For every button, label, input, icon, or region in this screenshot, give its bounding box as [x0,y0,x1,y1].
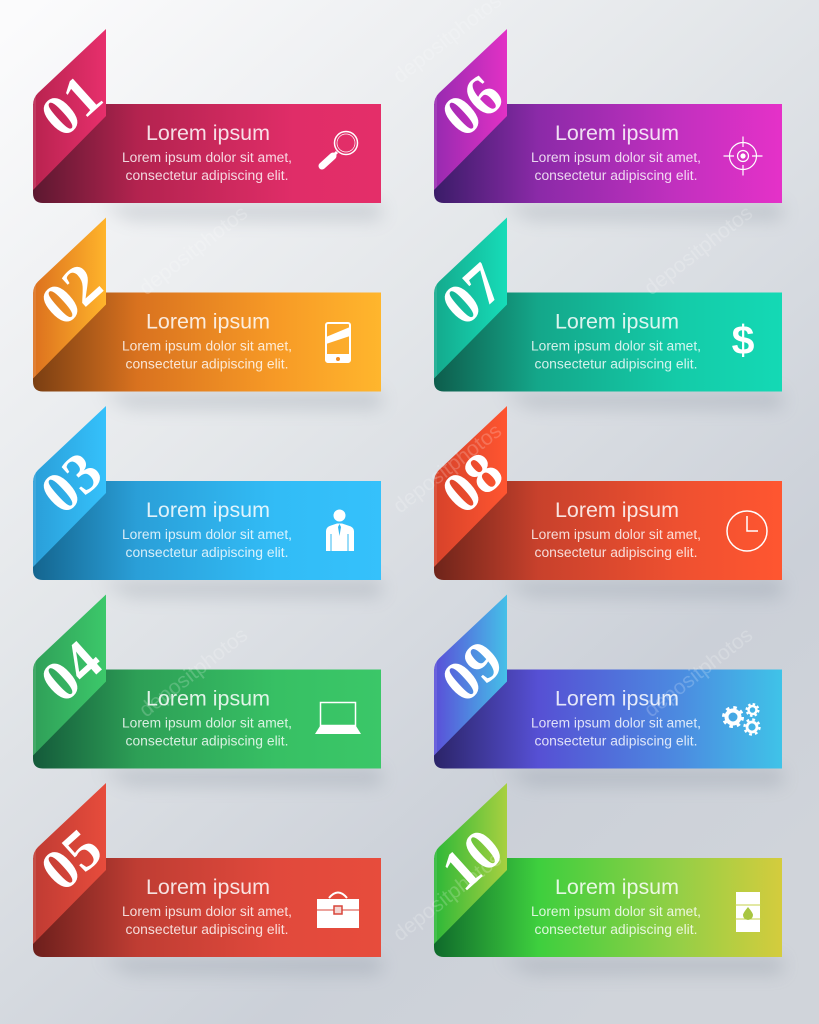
card 07 [429,218,782,408]
heading 03: Lorem ipsum [146,499,270,522]
description 04 [122,716,292,748]
banner 07 [434,292,782,392]
banner 04 [33,670,381,768]
description 03: Lorem ipsum dolor sit amet, [122,527,292,542]
card 08 [429,406,782,596]
number 03: 03 [28,439,114,526]
card 09 [429,594,782,784]
banner 05 [33,858,381,957]
heading 09: Lorem ipsum [555,688,679,710]
description 07: consectetur adipiscing elit. [534,356,698,372]
description 03 [122,527,292,560]
number 05: 05 [28,816,114,903]
description 04: Lorem ipsum dolor sit amet, [122,716,292,730]
description 06 [531,150,701,183]
icon: dollar: $ [732,317,755,363]
card 04 [28,594,381,784]
card 05 [28,783,381,973]
heading 08: Lorem ipsum [555,499,679,522]
watermark: depositphotos [135,201,252,300]
card 02 [28,218,381,408]
banner 03 [33,481,381,580]
description 01 [122,150,292,183]
banner 08 [434,481,782,580]
description 04: consectetur adipiscing elit. [126,734,288,748]
description 05: consectetur adipiscing elit. [126,922,288,937]
icon: magnifier [322,132,358,166]
description 08 [531,527,701,560]
folded tab 05 [33,783,106,944]
card 06 [429,29,782,219]
number 01: 01 [28,62,114,149]
number 07: 07 [429,250,515,338]
description 06: Lorem ipsum dolor sit amet, [531,150,701,165]
description 06: consectetur adipiscing elit. [534,168,698,183]
description 05 [122,904,292,937]
watermark: depositphotos [135,623,252,722]
heading 01: Lorem ipsum [146,122,270,145]
description 05: Lorem ipsum dolor sit amet, [122,904,292,919]
description 10: Lorem ipsum dolor sit amet, [531,904,701,919]
folded tab 02 [33,218,106,378]
number 08: 08 [429,439,515,526]
description 02: Lorem ipsum dolor sit amet, [122,338,292,354]
number 02: 02 [28,250,114,338]
icon: smartphone [326,323,350,363]
icon: oil barrel [735,892,761,932]
description 01: consectetur adipiscing elit. [126,168,288,183]
description 10: consectetur adipiscing elit. [534,922,698,937]
heading 07: Lorem ipsum [555,310,679,334]
description 08: Lorem ipsum dolor sit amet, [531,527,701,542]
folded tab 07 [434,218,507,378]
watermark: depositphotos [640,623,757,722]
icon: laptop [315,702,361,734]
banner 01 [33,104,381,203]
card 03 [28,406,381,596]
heading 04: Lorem ipsum [146,688,270,710]
banner 02 [33,292,381,392]
banner 06 [434,104,782,203]
heading 02: Lorem ipsum [146,310,270,334]
heading 05: Lorem ipsum [146,876,270,899]
icon: gears [724,704,760,734]
folded tab 10 [434,783,507,944]
folded tab 09 [434,594,507,756]
number 09: 09 [429,627,515,715]
watermark: depositphotos [640,201,757,300]
number 04: 04 [28,627,114,715]
banner 10 [434,858,782,957]
icon: briefcase [317,892,359,928]
banner 09 [434,670,782,768]
heading 10: Lorem ipsum [555,876,679,899]
description 01: Lorem ipsum dolor sit amet, [122,150,292,165]
folded tab 03 [33,406,106,567]
number 06: 06 [429,62,515,149]
folded tab 06 [434,29,507,190]
description 02: consectetur adipiscing elit. [126,356,288,372]
description 10 [531,904,701,937]
heading 06: Lorem ipsum [555,122,679,145]
card 01 [28,29,381,219]
folded tab 01 [33,29,106,190]
description 07: Lorem ipsum dolor sit amet, [531,338,701,354]
description 08: consectetur adipiscing elit. [534,545,698,560]
icon: businessman [326,510,354,551]
description 02 [122,338,292,372]
description 09 [531,716,701,748]
description 09: Lorem ipsum dolor sit amet, [531,716,701,730]
card 10 [429,783,782,973]
description 03: consectetur adipiscing elit. [126,545,288,560]
folded tab 08 [434,406,507,567]
description 09: consectetur adipiscing elit. [534,734,698,748]
watermark: depositphotos [389,419,506,518]
description 07 [531,338,701,372]
watermark [135,0,757,946]
folded tab 04 [33,594,106,756]
watermark: depositphotos [389,847,506,946]
icon: clock [727,511,767,551]
number 10: 10 [429,816,515,903]
icon: target [724,136,762,176]
